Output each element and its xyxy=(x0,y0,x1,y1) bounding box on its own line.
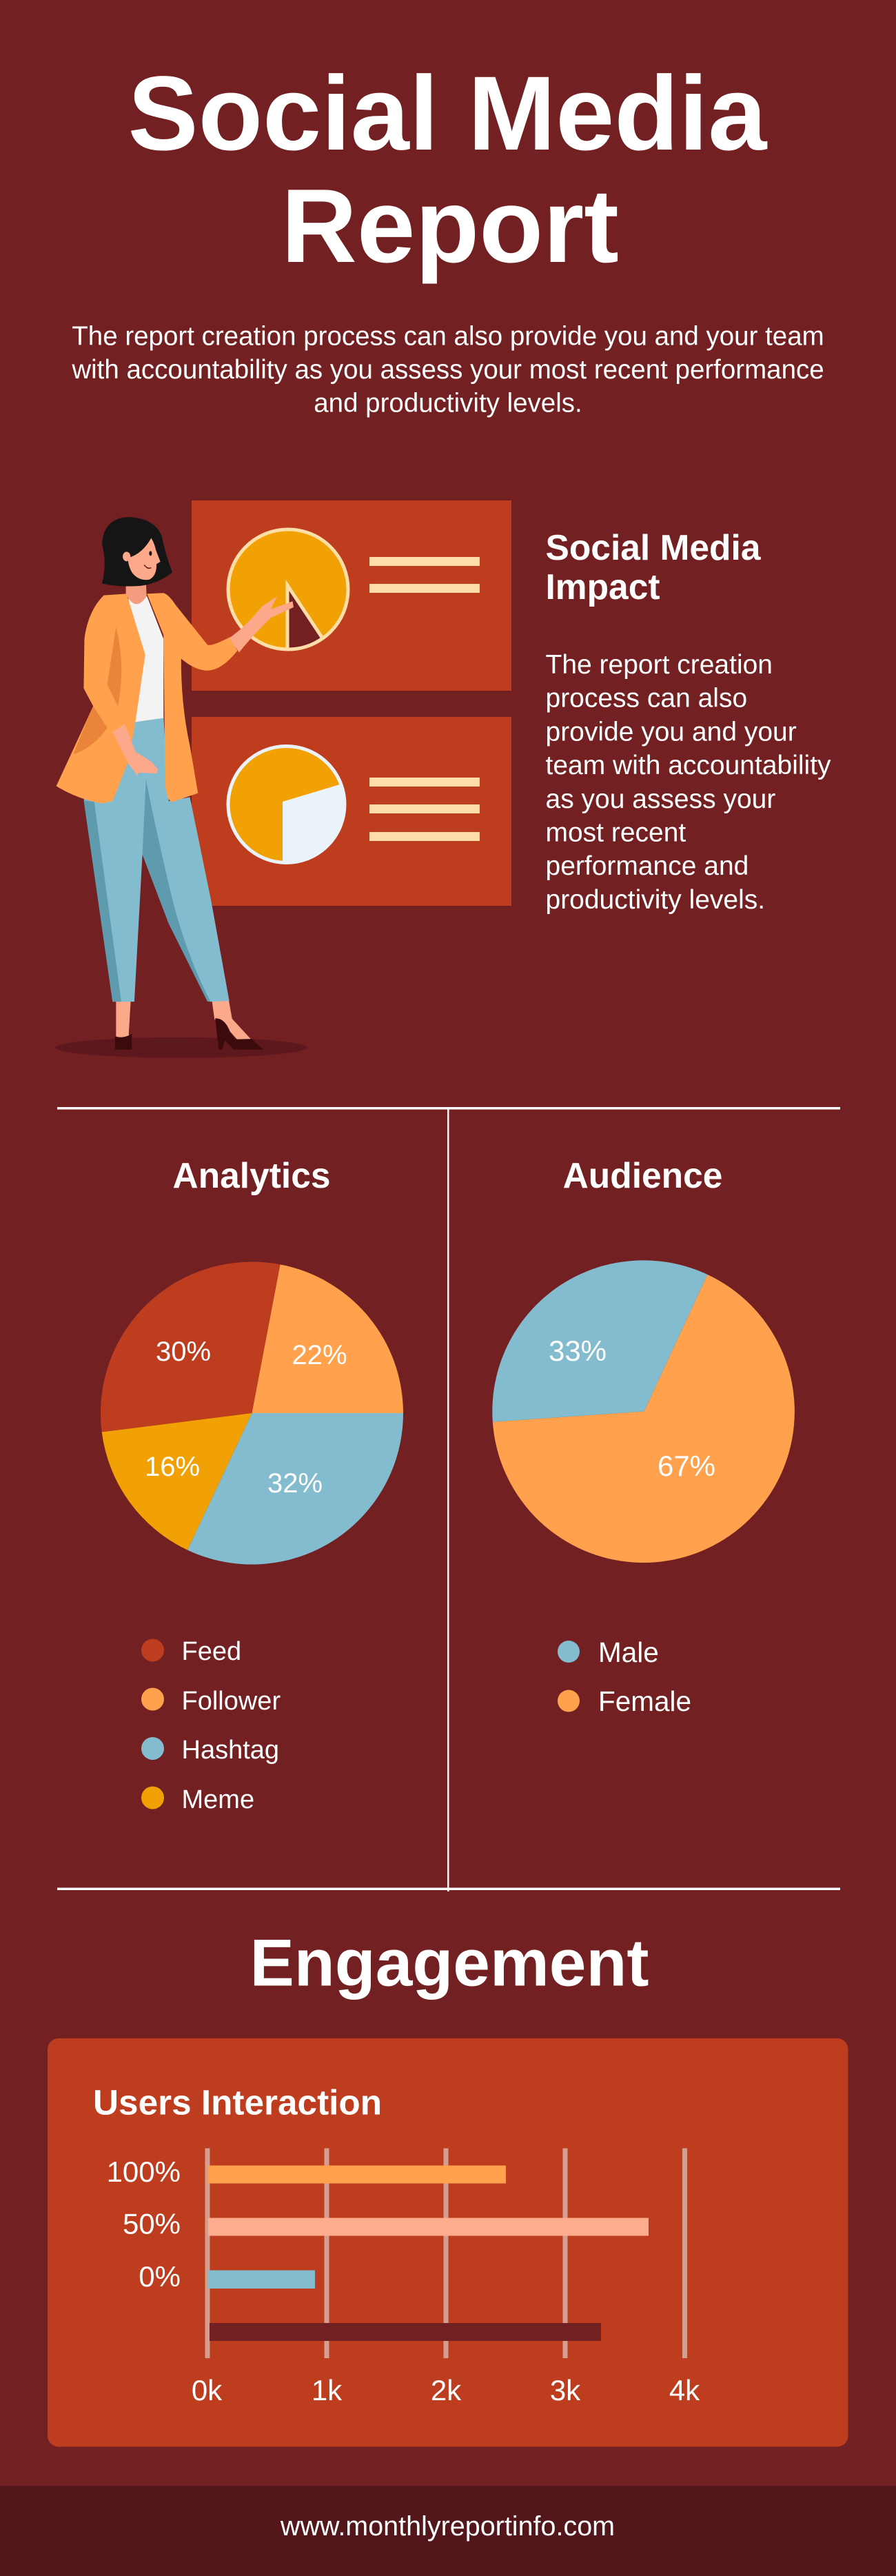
panel: lower slide xyxy=(192,717,511,906)
social media impact body text: process can also xyxy=(546,684,747,713)
analytics legend: Follower xyxy=(182,1687,281,1716)
footer band: www.monthlyreportinfo.com xyxy=(280,2511,615,2542)
upper slide text lines xyxy=(369,557,480,593)
intro text: and productivity levels. xyxy=(314,389,582,418)
analytics legend: Meme xyxy=(182,1785,254,1814)
audience heading: Audience xyxy=(563,1155,722,1195)
panel: users interaction xyxy=(48,2038,848,2447)
social media impact body text: provide you and your xyxy=(546,717,797,747)
audience pie chart: 33% xyxy=(549,1335,607,1367)
audience pie chart: 67% xyxy=(658,1450,715,1482)
bar chart: 3k xyxy=(550,2374,581,2406)
panel: presentation illustration xyxy=(55,500,511,1058)
audience legend xyxy=(558,1636,691,1717)
title: Social Media xyxy=(128,54,768,172)
intro text: The report creation process can also provide you and your team xyxy=(72,321,824,352)
audience legend: Female xyxy=(598,1685,691,1717)
social media impact body text: most recent xyxy=(546,818,686,848)
users interaction heading: Users Interaction xyxy=(93,2083,382,2122)
bar chart: 0k xyxy=(192,2374,223,2406)
social media impact body text: performance and xyxy=(546,851,749,881)
bar chart: 50% xyxy=(123,2207,181,2240)
panel: upper slide xyxy=(192,500,511,691)
intro text: with accountability as you assess your most recent performance xyxy=(71,355,824,385)
icon: pie with dark wedge xyxy=(228,529,348,649)
analytics legend: Feed xyxy=(182,1637,241,1666)
audience legend: Male xyxy=(598,1636,659,1668)
social media impact body text xyxy=(546,650,831,915)
social media impact body text: The report creation xyxy=(546,650,773,680)
footer band xyxy=(0,2486,896,2576)
lower slide text lines xyxy=(369,778,480,841)
social media impact heading: Impact xyxy=(546,567,660,607)
analytics heading: Analytics xyxy=(173,1155,330,1195)
social media impact heading: Social Media xyxy=(546,527,761,567)
analytics pie chart: 32% xyxy=(267,1468,323,1499)
bar chart: 2k xyxy=(431,2374,462,2406)
social media impact body text: productivity levels. xyxy=(546,885,765,915)
bar chart: 100% xyxy=(107,2156,181,2188)
icon: pie with light wedge xyxy=(228,746,345,863)
audience pie chart xyxy=(492,1260,795,1563)
analytics legend: Hashtag xyxy=(182,1736,279,1765)
social media impact heading xyxy=(546,527,761,607)
bar chart: 4k xyxy=(669,2374,700,2406)
title: Report xyxy=(281,168,619,285)
bar chart: 0% xyxy=(139,2260,181,2293)
bar chart: 1k xyxy=(312,2374,343,2406)
analytics pie chart: 22% xyxy=(292,1340,347,1370)
analytics pie chart xyxy=(101,1262,403,1565)
title xyxy=(128,54,768,285)
analytics pie chart: 30% xyxy=(156,1337,211,1367)
analytics pie chart: 16% xyxy=(145,1452,200,1482)
woman presenter figure xyxy=(55,517,307,1058)
bar chart xyxy=(107,2148,700,2406)
intro text xyxy=(71,321,824,418)
analytics legend xyxy=(141,1637,281,1814)
engagement heading: Engagement xyxy=(250,1926,649,2000)
social media impact body text: team with accountability xyxy=(546,751,831,780)
social media impact body text: as you assess your xyxy=(546,784,775,814)
